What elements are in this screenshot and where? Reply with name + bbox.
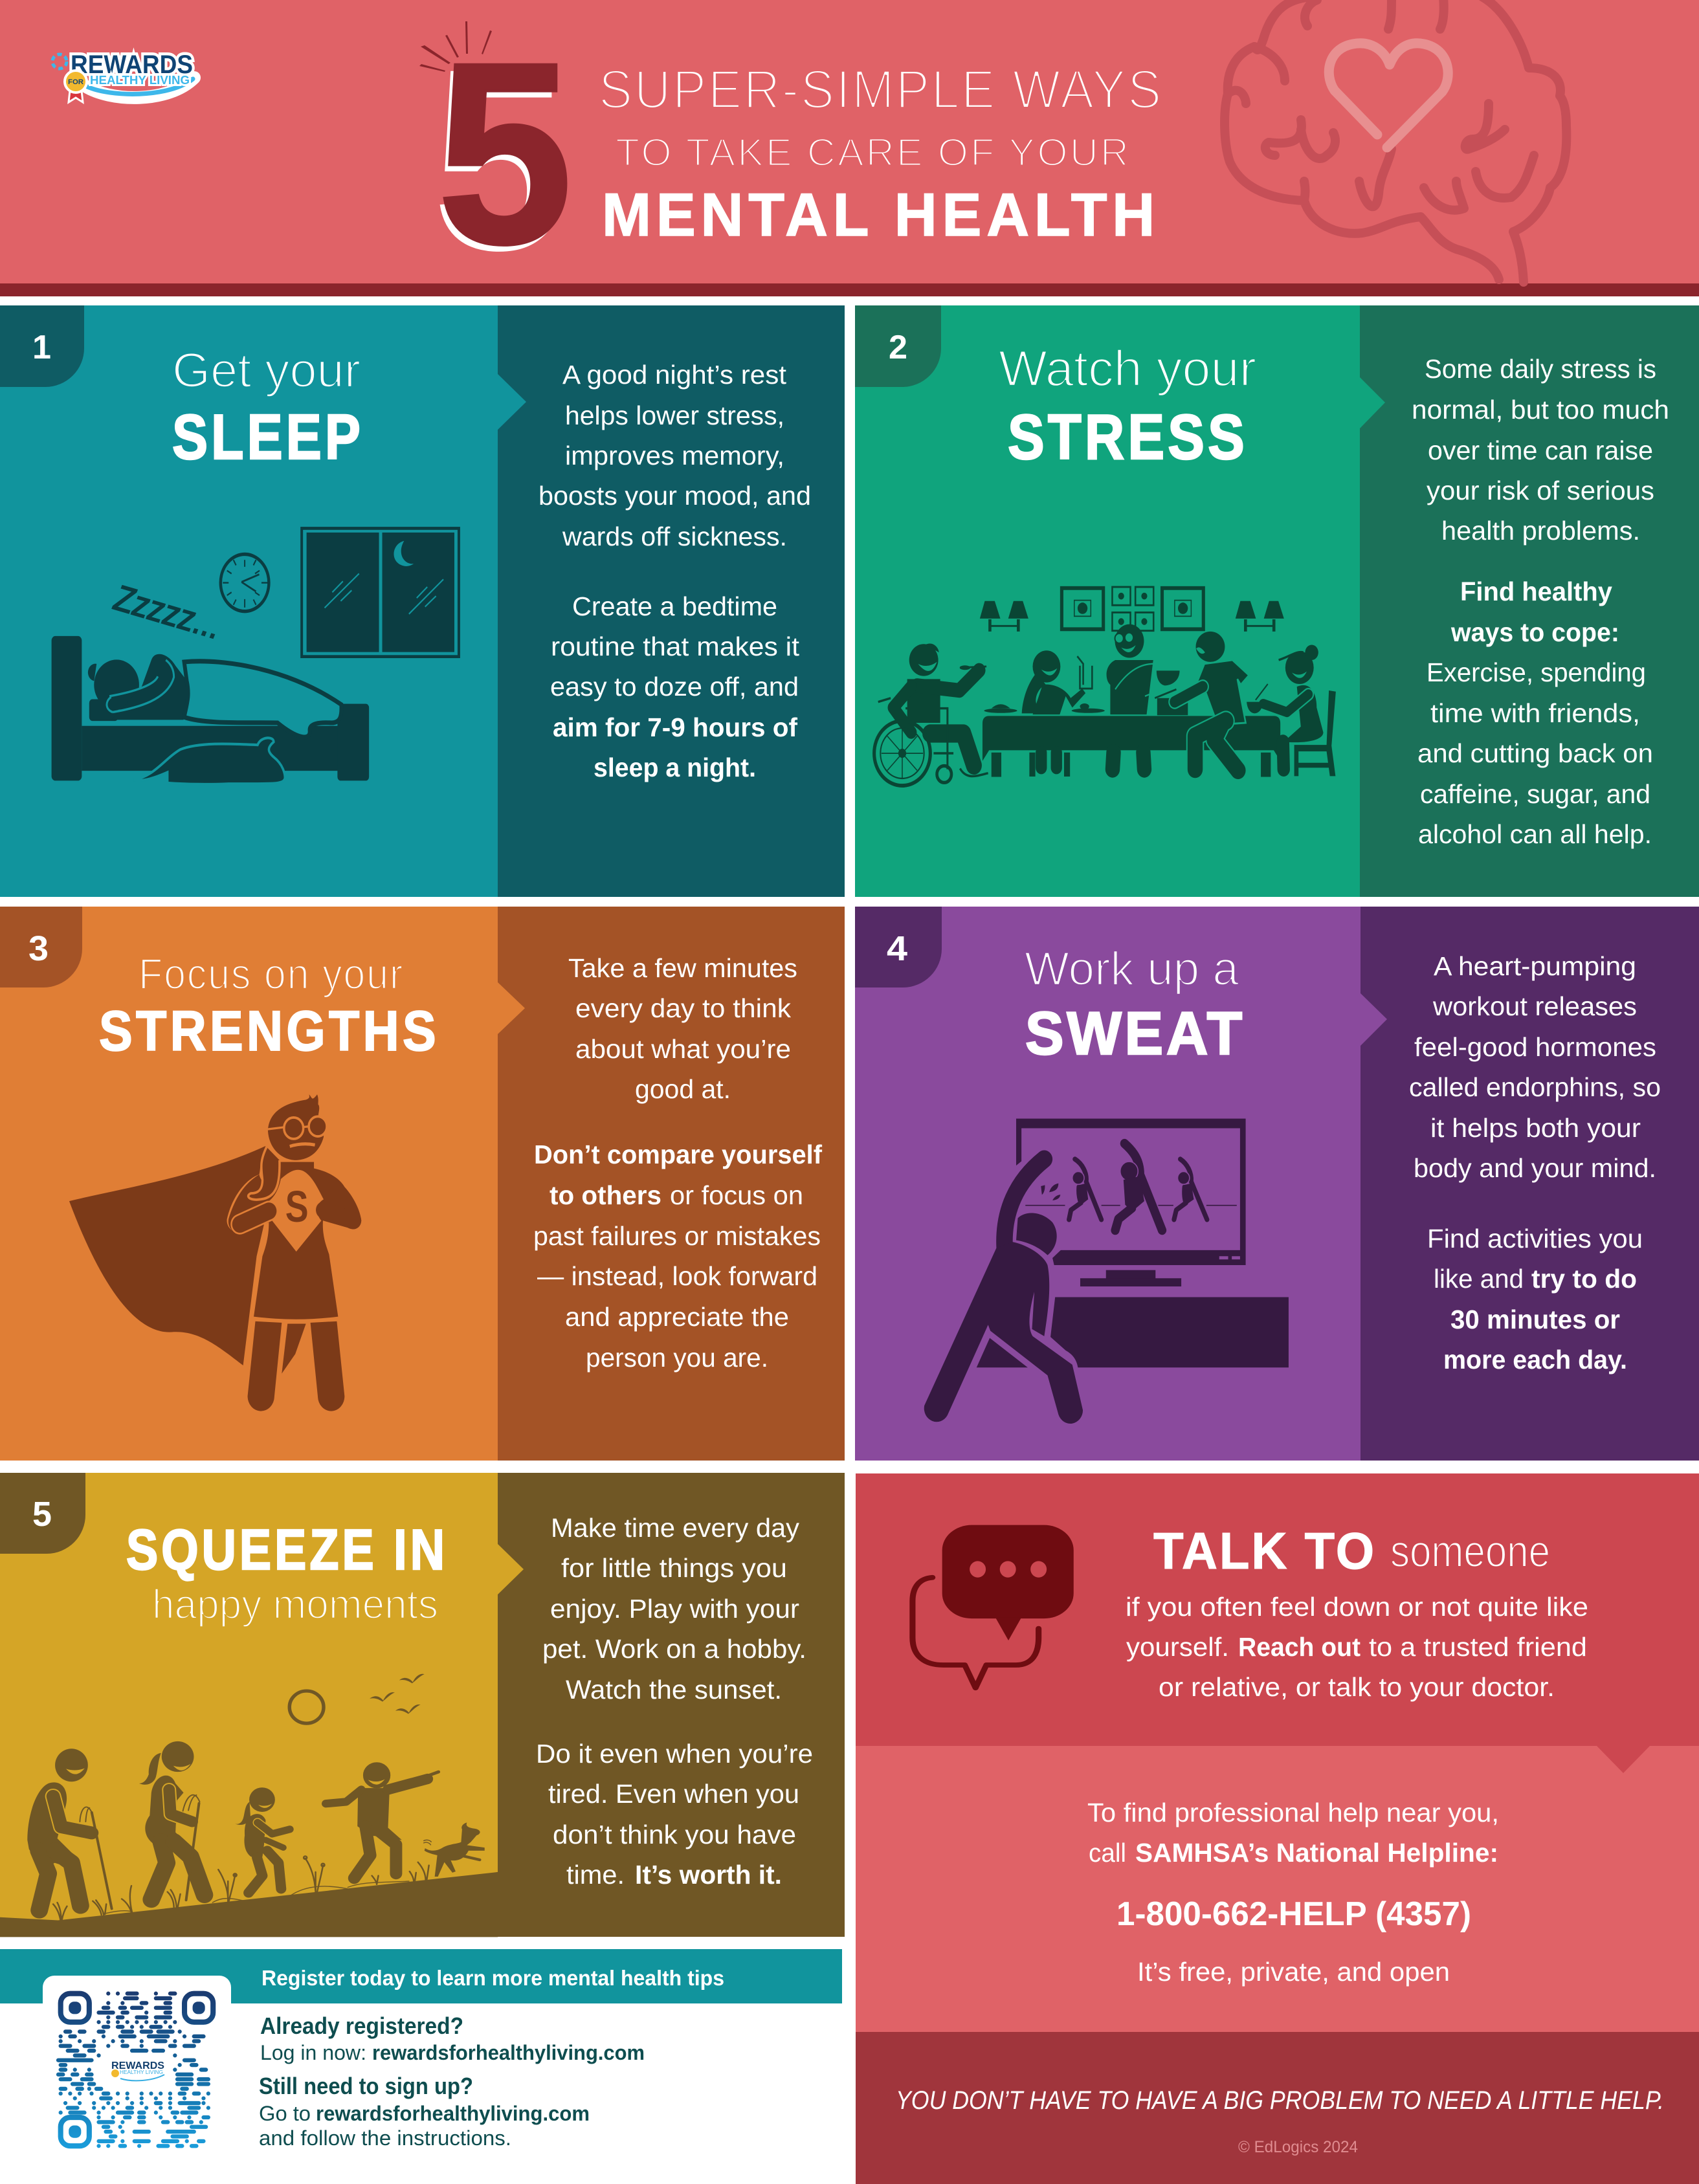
text: Reach out [1238, 1632, 1360, 1662]
callout notch [1597, 1746, 1650, 1773]
sign-in instructions: and follow the instructions. [259, 2126, 511, 2150]
body text: Don’t compare yourself [534, 1140, 822, 1169]
number tab [855, 907, 942, 987]
body text: every day to think [575, 993, 792, 1023]
exercising person [924, 1159, 1083, 1424]
body text: time with friends, [1430, 698, 1640, 728]
heading [1153, 1522, 1550, 1580]
body [228, 1162, 361, 1319]
text: if you often feel down or not quite like [1126, 1592, 1588, 1622]
heading: Work up a [1025, 943, 1239, 995]
dog [133, 738, 285, 784]
heading: Focus on your [139, 950, 404, 998]
body text: sleep a night. [594, 753, 756, 782]
body text: health problems. [1441, 516, 1640, 546]
body text: boosts your mood, and [539, 481, 811, 511]
heading: SQUEEZE IN [126, 1517, 448, 1582]
body text: Make time every day [551, 1513, 800, 1543]
panel 5: happy moments [0, 1473, 845, 1937]
panel: talk to someone [856, 1473, 1699, 2032]
heading [999, 340, 1256, 472]
heading: STRENGTHS [99, 1000, 439, 1063]
heading [172, 343, 364, 472]
big numeral 5: 5 [432, 15, 568, 304]
logo: Rewards for Healthy Living: REWARDS [71, 50, 193, 79]
number tab: 1 [32, 329, 51, 366]
header banner [0, 0, 1699, 296]
body text: A heart-pumping [1434, 951, 1636, 981]
body text: helps lower stress, [565, 401, 784, 430]
chest shield [269, 1170, 324, 1252]
number tab: 3 [28, 929, 49, 968]
standing person serving [1155, 632, 1249, 771]
birds [370, 1674, 425, 1714]
heading: Watch your [999, 340, 1256, 397]
body text: and cutting back on [1417, 738, 1653, 768]
icon: speech bubbles [913, 1525, 1074, 1688]
body text: Find healthy [1460, 577, 1612, 606]
body text: don’t think you have [553, 1820, 796, 1849]
heading [99, 950, 439, 1063]
big numeral 5: 5 [437, 8, 573, 298]
chest letter S: S [285, 1182, 309, 1231]
helpline: SAMHSA’s National Helpline: [1135, 1838, 1498, 1868]
number tab [0, 1473, 85, 1554]
heading: SLEEP [172, 401, 364, 472]
sun [289, 1691, 324, 1723]
person in wheelchair [874, 644, 988, 786]
person with glasses [1107, 624, 1180, 769]
helpline [1087, 1798, 1499, 1987]
body text: try to do [1531, 1264, 1637, 1294]
sweat drops [1041, 1184, 1060, 1200]
ground [0, 1872, 498, 1937]
sign-in instructions: rewardsforhealthyliving.com [316, 2102, 590, 2125]
body text: improves memory, [565, 441, 784, 470]
helpline: It’s free, private, and open [1137, 1957, 1450, 1987]
panel 1: sleep [0, 305, 845, 897]
legs [248, 1321, 344, 1411]
sleeping person [88, 654, 190, 720]
panel: register call-to-action [0, 1949, 842, 2176]
on-screen instructors [1069, 1143, 1207, 1230]
title lines: TO TAKE CARE OF YOUR [616, 131, 1131, 174]
body text [536, 1513, 813, 1890]
number tab [0, 305, 84, 387]
number tab: 5 [32, 1495, 52, 1534]
grandfather [27, 1748, 112, 1910]
television [1016, 1119, 1246, 1286]
body text: and appreciate the [565, 1302, 789, 1332]
text [1126, 1592, 1588, 1702]
arrow [1359, 377, 1385, 429]
heading: SWEAT [1025, 999, 1245, 1067]
body text: alcohol can all help. [1418, 819, 1652, 849]
title [419, 8, 1163, 304]
copyright: © EdLogics 2024 [1238, 2138, 1358, 2156]
number tab [855, 305, 941, 387]
title lines [599, 59, 1163, 248]
heading [126, 1517, 448, 1627]
body text: Find activities you [1427, 1224, 1643, 1253]
sign-in instructions: Still need to sign up? [259, 2073, 473, 2099]
helpline: To find professional help near you, [1087, 1798, 1499, 1827]
body text [539, 360, 811, 782]
body text: tired. Even when you [548, 1779, 799, 1809]
body text: or focus on [670, 1180, 803, 1210]
body text: Take a few minutes [568, 953, 797, 983]
table [983, 703, 1280, 777]
body text: more each day. [1443, 1345, 1627, 1374]
heading: TALK TO [1153, 1522, 1376, 1580]
arrow [1360, 993, 1387, 1046]
arrow [497, 982, 525, 1035]
window [302, 528, 459, 657]
body text [1409, 951, 1661, 1374]
panel 3: strengths [0, 907, 845, 1461]
body text: it helps both your [1430, 1113, 1641, 1143]
body text [1412, 354, 1669, 849]
helpline: call [1089, 1838, 1126, 1868]
body text: Some daily stress is [1425, 354, 1656, 384]
body text: called endorphins, so [1409, 1072, 1661, 1102]
illustration: superhero with cape [69, 1094, 361, 1411]
logo: Rewards for Healthy Living [52, 50, 194, 102]
body text: for little things you [561, 1553, 787, 1583]
head [267, 1094, 327, 1160]
sign-in instructions [259, 2013, 645, 2150]
footer banner [856, 2032, 1699, 2184]
body text [533, 953, 822, 1373]
text: or relative, or talk to your doctor. [1159, 1672, 1555, 1702]
title lines: SUPER-SIMPLE WAYS [599, 59, 1163, 120]
body text: body and your mind. [1414, 1153, 1656, 1183]
body text: enjoy. Play with your [550, 1594, 799, 1624]
arrow [497, 1543, 524, 1595]
person with drink [1022, 650, 1092, 777]
body text: about what you’re [575, 1034, 791, 1064]
sign-in instructions: rewardsforhealthyliving.com [372, 2041, 645, 2064]
body text: A good night’s rest [562, 360, 787, 390]
sign-in instructions: Log in now: [260, 2041, 366, 2064]
body text: past failures or mistakes [533, 1221, 821, 1251]
grass [53, 1856, 429, 1920]
title lines: MENTAL HEALTH [602, 181, 1160, 248]
body text: aim for 7-9 hours of [553, 712, 797, 742]
cape [69, 1146, 265, 1365]
body text: your risk of serious [1427, 476, 1654, 505]
logo: Rewards for Healthy Living: FOR [68, 78, 83, 86]
helpline: 1-800-662-HELP (4357) [1116, 1895, 1471, 1933]
illustration: family walking outdoors with dog [0, 1674, 498, 1937]
body text: to others [550, 1180, 661, 1210]
number tab: 2 [889, 329, 907, 366]
wall lamps and pictures [980, 587, 1284, 632]
body text: like and [1434, 1264, 1524, 1294]
body text: routine that makes it [551, 632, 800, 661]
illustration: person exercising with TV [924, 1119, 1289, 1424]
body text: Create a bedtime [572, 591, 777, 621]
cabinet [977, 1297, 1289, 1367]
arrow [497, 373, 526, 430]
body text: pet. Work on a hobby. [542, 1634, 806, 1664]
body text: — instead, look forward [537, 1261, 817, 1291]
number tab [0, 907, 82, 987]
panel 4: sweat [855, 907, 1699, 1461]
body text: easy to doze off, and [550, 672, 799, 701]
body text: over time can raise [1428, 436, 1653, 465]
clock [221, 554, 269, 612]
body text: normal, but too much [1412, 395, 1669, 425]
icon: brain with heart [1225, 0, 1566, 282]
body text: It’s worth it. [635, 1860, 782, 1890]
QR card: HEALTHY LIVING [120, 2069, 163, 2075]
heading: happy moments [152, 1581, 438, 1627]
heading [1025, 943, 1245, 1067]
body text: Exercise, spending [1427, 657, 1646, 687]
sign-in instructions: Go to [259, 2102, 311, 2125]
body text: workout releases [1432, 991, 1637, 1021]
logo: Rewards for Healthy Living: HEALTHY LIVING [90, 74, 190, 87]
seated person on chair [1247, 645, 1336, 776]
number tab: 4 [887, 929, 907, 968]
illustration: person sleeping in bed with dog [52, 528, 459, 784]
body text: Watch the sunset. [566, 1675, 782, 1704]
body text: Do it even when you’re [536, 1739, 813, 1769]
body text: good at. [635, 1074, 731, 1104]
QR card [43, 1976, 231, 2176]
body text: wards off sickness. [562, 522, 787, 551]
body text: 30 minutes or [1450, 1305, 1620, 1334]
sign-in instructions: Already registered? [260, 2013, 463, 2039]
blanket [184, 661, 342, 737]
heading: Get your [172, 343, 361, 397]
grandmother [139, 1741, 205, 1900]
child [235, 1787, 290, 1893]
heading: Register today to learn more mental health tips [261, 1966, 724, 1990]
body text: caffeine, sugar, and [1420, 779, 1650, 809]
dog [423, 1822, 485, 1877]
text: yourself. [1126, 1632, 1229, 1662]
heading: someone [1390, 1526, 1550, 1576]
illustration: friends sharing a meal [874, 587, 1336, 786]
panel 2: stress [855, 305, 1699, 897]
snore text: Zzzzz... [110, 577, 224, 648]
text: to a trusted friend [1369, 1632, 1587, 1662]
body text: feel-good hormones [1414, 1032, 1656, 1062]
body text: ways to cope: [1450, 617, 1619, 647]
heading: STRESS [1008, 401, 1248, 472]
body text: time. [566, 1860, 625, 1890]
fists [240, 1210, 353, 1224]
QR card: REWARDS [111, 2060, 164, 2071]
icon: burst lines [419, 21, 492, 72]
bed [52, 636, 369, 780]
hair strand [249, 1147, 280, 1200]
father pointing [326, 1761, 439, 1878]
body text: person you are. [586, 1343, 768, 1373]
